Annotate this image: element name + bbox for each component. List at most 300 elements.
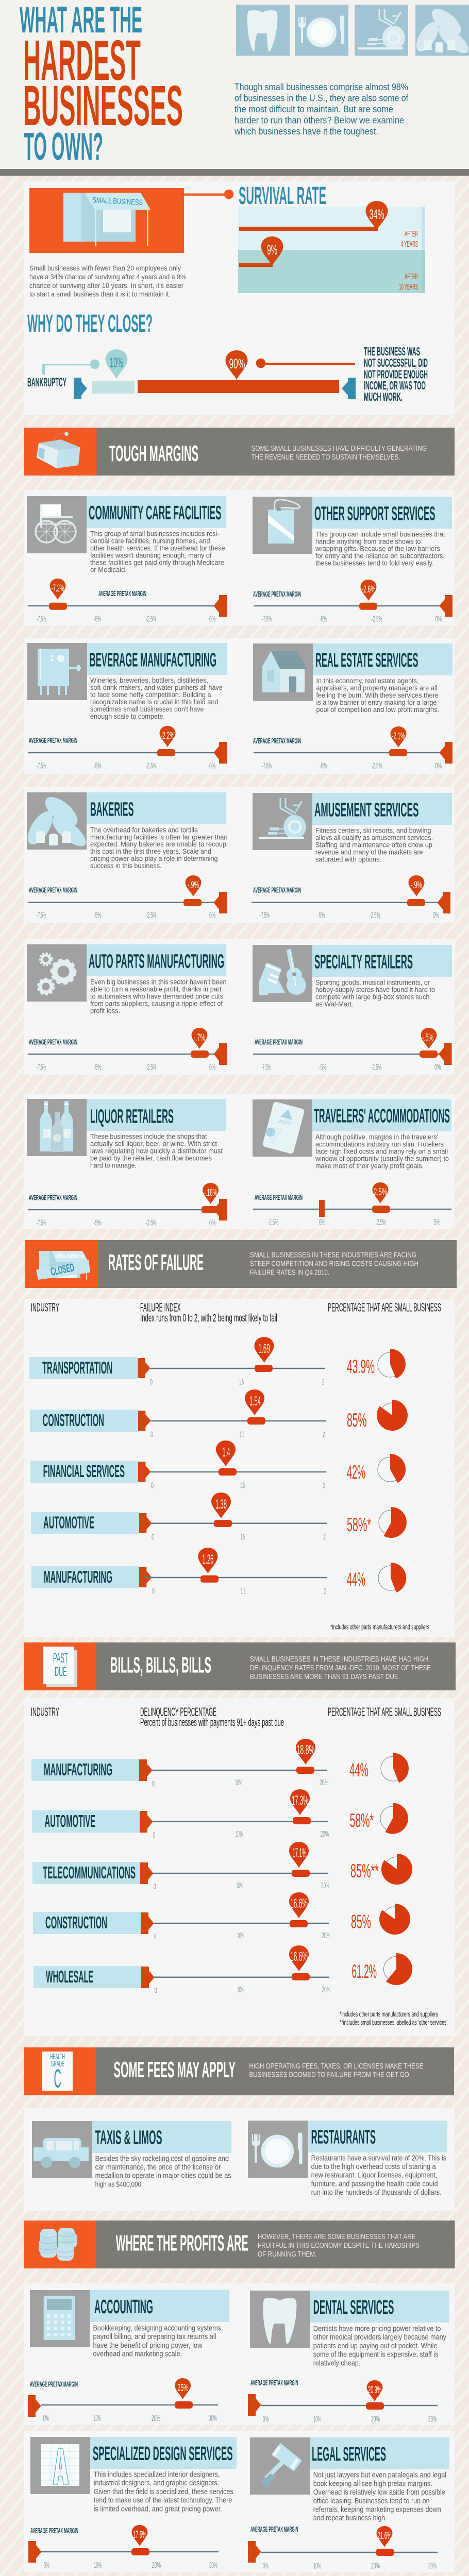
row: automotive: 17.3% [292,1793,308,1808]
body text [313,2471,446,2522]
row: construction: CONSTRUCTION [42,1411,104,1430]
chart: survival rate: 34% [369,207,384,222]
panel: rates of failure table [24,1299,455,1637]
chart: reasons for closing: 10% [110,355,123,370]
body text: other health services. If the overhead for these [90,545,225,552]
body text [90,1133,223,1170]
survival text block: have a 34% chance of surviving after 4 years and a 9% [29,273,186,281]
row: manufacturing: 20% [320,1778,328,1787]
body text: soft-drink makers, and water purifiers all have [90,684,223,691]
chart: margin 17.6%: 10% [94,2561,102,2570]
row: construction: 0 [154,1933,157,1941]
row: telecommunications: 20% [321,1882,330,1890]
body text: run into the hundreds of thousands of dollars. [311,2189,442,2197]
card: amusement services [252,793,452,920]
row: transportation: 1.5 [239,1378,244,1386]
body text: compete with large big-box stores such [315,993,430,1001]
card: community care facilities [27,496,227,624]
chart: margin 20.9%: 10% [313,2415,321,2424]
section header: where the profits are: WHERE THE PROFITS ARE [116,2230,248,2256]
row: telecommunications: 10% [236,1882,243,1890]
row: financial services: 2 [323,1481,325,1490]
chart: margin -.9%: -.9% [188,880,199,891]
body text: face high fixed costs and many rely on a small [315,1148,448,1156]
body text: patients end up paying out of pocket. While [313,2342,437,2350]
section header: some fees may apply [24,2047,454,2095]
body text [93,2324,223,2359]
icon: health grade card: GRADE [51,2060,64,2069]
chart: margin -.5%: -.5% [422,1032,433,1043]
chart: margin -.18%: -5% [94,1218,101,1227]
description: FRUITFUL IN THIS ECONOMY DESPITE THE HARDSHIPS [258,2242,420,2250]
chart: margin -2.6%: -2.6% [362,584,376,595]
description: HOWEVER, THERE ARE SOME BUSINESSES THAT ARE [258,2233,416,2241]
body text [94,2470,233,2513]
card: bakeries: BAKERIES [90,799,134,820]
icon: health grade card: C [54,2064,61,2093]
chart: margin -.7% [28,1028,227,1072]
column headers [31,1705,441,1728]
chart: margin -.18%: 0% [209,1218,215,1227]
card: bakeries [23,792,227,920]
chart: margin -.5% [253,1028,451,1072]
icon: past due note: PAST [53,1650,68,1666]
chart: margin 20.9%: 20% [371,2415,380,2424]
chart: margin 2.5%: 2.5% [377,1218,386,1227]
chart: margin 20.9%: 30% [428,2415,437,2424]
survival text block: Small businesses with fewer than 20 employees only [29,264,181,272]
chart: margin 20.9%: AVERAGE PRETAX MARGIN [250,2379,298,2387]
chart: margin -.18%: -.18% [204,1188,217,1198]
chart: margin -2.6%: -2.5% [372,615,382,624]
card: restaurants: RESTAURANTS [311,2127,376,2148]
body text: sometimes small businesses don't have [90,705,204,713]
description: SMALL BUSINESSES IN THESE INDUSTRIES ARE FACING [250,1251,416,1260]
row: manufacturing: 18.8% [297,1743,314,1757]
description [252,445,427,462]
row: automotive: AUTOMOTIVE [44,1811,95,1831]
body text: revenue and many of the markets are [315,848,423,856]
panel: beverage and real estate: BEVERAGE MANUFACTURING [90,649,216,671]
chart: margin -2.2%: -2.2% [161,731,175,741]
icon: hotel key card [253,1099,312,1157]
row: financial services: 42% [347,1462,365,1483]
chart: margin -.9%: -2.5% [146,911,157,920]
panel: taxis and restaurants [24,2108,455,2211]
body text: hard to manage. [90,1162,137,1170]
card: accounting: ACCOUNTING [94,2296,153,2318]
row: manufacturing: 1.5 [241,1587,246,1596]
body text: Although positive, margins in the travelers' [315,1133,438,1141]
chart: margin 17.6%: 17.6% [133,2530,146,2540]
icon: bottles [27,1099,87,1156]
panel: community care and other support [24,490,455,625]
row: financial services: 0 [151,1481,154,1490]
body text: Overhead is relatively low aside from possible [313,2488,445,2497]
body text [90,826,228,870]
chart: margin -7.2%: AVERAGE PRETAX MARGIN [98,590,146,598]
row: construction: 20% [322,1931,330,1940]
chart: reasons for closing: MUCH WORK. [364,390,403,403]
row: construction: 85% [351,1911,371,1933]
row: construction [33,1892,410,1941]
icon: gavel [250,2437,310,2495]
body text [315,979,435,1008]
chart: margin 21.6%: AVERAGE PRETAX MARGIN [250,2526,298,2534]
row: transportation [29,1337,406,1386]
body text: accommodations industry run slim. Hoteliers [315,1141,444,1148]
intro text: the most difficult to maintain. But are some [234,104,393,114]
body text: appraisers, and property managers are all [316,684,437,692]
body text: able to turn a reasonable profit, thanks in part [90,986,222,993]
card: real estate services [253,643,453,771]
row: financial services: FINANCIAL SERVICES [43,1462,125,1481]
body text: pricing power also play a role in determining [90,855,217,862]
body text: these businesses tend to fold very easily. [315,560,434,567]
body text: The overhead for bakeries and tortilla [90,826,198,834]
row: construction: 85% [347,1410,367,1431]
chart: margin -.7%: -5% [94,1063,101,1072]
row: wholesale: 16.6% [290,1950,308,1964]
chart: margin -2.6%: AVERAGE PRETAX MARGIN [253,590,301,599]
chart: margin 21.6%: 10% [313,2562,321,2571]
row: manufacturing: 10% [235,1778,242,1787]
row: wholesale: 20% [322,1986,330,1994]
body text: actually sell liquor, beer, or wine. With strict [90,1140,217,1148]
chart: margin -.5%: AVERAGE PRETAX MARGIN [255,1038,303,1046]
icon: elliptical machine [253,793,312,850]
icon: house [253,643,313,701]
row: automotive: 0 [152,1533,155,1541]
chart: margin -.18% [28,1183,227,1227]
chart: margin 2.5%: AVERAGE PRETAX MARGIN [255,1194,303,1202]
chart: margin -.7%: 0% [209,1063,215,1072]
body text: book keeping all see high pretax margins. [313,2480,432,2488]
body text: to automakers who have demanded price cuts [90,993,223,1001]
body text: handle anything from trade shows to [315,538,421,546]
body text [315,531,445,567]
chart: margin -.5%: -5% [319,1063,327,1072]
icon: coin stacks [39,2228,77,2261]
icon: health grade card: HEALTH [50,2053,65,2061]
row: telecommunications: TELECOMMUNICATIONS [43,1863,136,1882]
body text [95,2155,231,2189]
row: construction: 16.6% [290,1896,308,1911]
row: manufacturing: 2 [324,1587,326,1596]
row: manufacturing: 1.26 [202,1552,213,1567]
card: taxis and limos [32,2121,231,2189]
body text: success in this business. [90,862,162,870]
illustration: small business storefront [29,188,184,253]
survival text block: to start a small business than it is it to maintain it. [29,291,171,298]
body text: Dentists have more pricing power relative to [313,2325,441,2333]
intro text: Though small businesses comprise almost 98% [234,81,408,92]
section header: bills, bills, bills: BILLS, BILLS, BILLS [110,1653,211,1678]
chart: margin 2.5%: 2.5% [374,1187,387,1198]
chart: margin 25%: 25% [177,2383,189,2394]
row: construction: 0 [150,1430,153,1439]
body text: window of opportunity (usually the summer) to [315,1155,449,1163]
chart: reasons for closing: 90% [229,356,245,371]
chart: margin -.9%: -7.5% [260,911,270,920]
card: restaurants [248,2121,447,2197]
body text: feeling the burn. With these services there [316,691,439,699]
chart: margin -2.1%: -7.5% [262,762,272,771]
row: automotive: 1.5 [241,1533,245,1541]
column headers: FAILURE INDEX [140,1301,181,1314]
row: manufacturing: 0 [152,1587,155,1596]
row: construction: 10% [237,1931,244,1940]
chart: margin 2.5%: 0% [319,1218,325,1227]
section header: rates of failure: RATES OF FAILURE [108,1250,204,1275]
body text: overhead and marketing scale. [93,2350,182,2359]
body text: Even big businesses in this sector haven't been [90,978,227,986]
text: BUSINESSES [23,74,183,138]
icon: gears [27,944,87,1002]
description: SMALL BUSINESSES IN THESE INDUSTRIES HAVE HAD HIGH [250,1655,429,1664]
section header: where the profits are [24,2221,455,2268]
column headers: INDUSTRY [31,1705,59,1719]
section header: rates of failure [25,1240,457,1288]
chart: margin 25%: 30% [209,2414,217,2423]
chart: reasons for closing [27,345,428,403]
body text: other medical providers largely because many [313,2333,447,2342]
body text: be paid by the retailer, cash flow becomes [90,1155,212,1162]
chart: margin -7.2%: -5% [94,615,101,624]
description: BUSINESSES DOOMED TO FAILURE FROM THE GET GO. [249,2071,411,2079]
row: manufacturing: 44% [349,1759,368,1781]
chart: margin 2.5% [253,1182,451,1227]
body text [313,2325,447,2367]
body text: In this economy, real estate agents, [316,677,418,685]
panel: community care and other support: COMMUNITY CARE FACILITIES [89,502,222,524]
footnotes [340,2010,447,2026]
chart: reasons for closing: BANKRUPTCY [27,376,66,389]
chart: margin -2.1% [253,726,453,771]
body text: laws regulating how quickly a distributor must [90,1147,223,1155]
illustration: small business storefront: SMALL BUSINESS [92,196,143,207]
card: other support services [253,497,453,624]
body text: Bookkeeping, designing accounting systems, [93,2324,223,2332]
connector line [184,190,233,199]
row: manufacturing: 44% [347,1569,365,1590]
row: transportation: 2 [322,1378,325,1386]
icon: plate tile [295,5,348,56]
body text: enough scale to compete. [90,713,165,720]
chart: margin 17.6%: AVERAGE PRETAX MARGIN [30,2527,78,2535]
row: automotive [31,1493,407,1541]
body text: wrapping gifts. Because of the low barriers [315,545,440,553]
body text [315,826,433,863]
body text: This group can include small businesses that [315,531,445,538]
card: beverage manufacturing [27,643,227,771]
chart: margin -7.2% [28,579,227,624]
chart: margin -2.2%: 0% [209,762,215,771]
body text: recognizable name is crucial in this field and [90,698,219,706]
row: manufacturing: MANUFACTURING [44,1567,112,1586]
chart: margin -.9% [28,875,227,920]
row: automotive: 58%* [349,1810,374,1831]
body text: Restaurants have a survival rate of 20%. This is [311,2154,446,2162]
body text: relatively cheap. [313,2359,360,2367]
icon: hotel key card: HOTEL [266,1125,284,1146]
panel: liquor retailers and travelers' accommodations [24,1094,455,1229]
description: THE REVENUE NEEDED TO SUSTAIN THEMSELVES. [252,453,400,462]
icon: closed store [36,1251,90,1280]
body text: make most of their yearly profit goals. [315,1162,424,1170]
description: SOME SMALL BUSINESSES HAVE DIFFICULTY GENERATING [252,445,427,453]
chart: margin -2.1%: -5% [320,762,327,771]
chart: margin 17.6%: 30% [209,2561,217,2570]
body text: for entry and the reliance on subcontractors, [315,552,445,560]
body text: or Medicaid. [90,566,127,573]
chart: margin 21.6%: 20% [371,2562,380,2571]
chart: margin -2.6% [253,580,453,624]
chart: margin 25%: AVERAGE PRETAX MARGIN [30,2381,78,2389]
icon: hotel key card: INSERT [277,1118,292,1128]
panel: survival rate and why do they close: SURVIVAL RATE [239,182,326,210]
chart: margin -.9%: -.9% [411,880,422,891]
icon: bread [23,792,90,851]
row: automotive: 20% [321,1830,329,1839]
chart: margin -.5%: -2.5% [371,1063,381,1072]
body text: manufacturing facilities is often far greater than [90,833,228,841]
section header: tough margins [24,428,455,476]
row: manufacturing [31,1548,406,1596]
description [250,1655,431,1681]
row: construction: 1.5 [240,1430,244,1439]
card: legal services [248,2437,449,2571]
row: construction: 1.54 [249,1394,261,1409]
column headers: Percent of businesses with payments 91+ days past due [140,1717,284,1728]
row: transportation: 0 [150,1378,153,1386]
chart: margin -2.2%: -5% [94,762,101,771]
chart: margin -.7%: AVERAGE PRETAX MARGIN [29,1038,77,1046]
body text: These businesses include the shops that [90,1133,207,1141]
description [249,2062,424,2079]
chart: margin -.18%: -2.5% [146,1218,157,1227]
row: transportation: 1.69 [258,1342,270,1356]
body text: some of the equipment is expensive, staff is [313,2351,438,2359]
description [250,1251,418,1277]
section header: some fees may apply: SOME FEES MAY APPLY [113,2057,236,2082]
panel: beverage and real estate [24,638,455,774]
card: specialty retailers [253,945,452,1072]
row: automotive: 1.38 [215,1497,227,1512]
card: liquor retailers: LIQUOR RETAILERS [90,1106,174,1127]
card: specialized design services [28,2437,237,2570]
icon: past due note [43,1647,77,1687]
icon: plate [248,2121,308,2178]
chart: margin -.9%: 0% [433,911,439,920]
section header: tough margins: TOUGH MARGINS [109,441,198,466]
survival text block [29,264,186,298]
row: transportation: TRANSPORTATION [42,1358,112,1377]
body text: facilities wasn't daunting enough, many of [90,552,212,560]
title: WHAT ARE THE [20,0,142,41]
card: dental services [248,2291,449,2424]
chart: margin 17.6% [28,2525,219,2570]
body text: car maintenance, the price of the license or [95,2163,221,2172]
body text: referrals, keeping marketing expenses down [313,2506,441,2514]
body text: high as $400,000. [95,2180,143,2189]
chart: margin 2.5%: 5% [434,1218,440,1227]
body text: This includes specialized interior designers, [94,2470,220,2479]
body text: hobby-supply stores have found it hard to [315,986,435,994]
icon: letter on grid [30,2437,90,2494]
title [20,0,183,168]
chart: margin -2.6%: -5% [320,615,327,624]
panel: accounting and dental services [24,2283,455,2425]
body text: alleys all qualify as amusement services. [315,834,433,841]
row: manufacturing: MANUFACTURING [44,1760,112,1779]
chart: margin 20.9%: 0% [263,2415,269,2424]
icon: bread tile [412,4,469,58]
body text: dential care facilities, nursing homes, and [90,537,210,545]
description: STEEP COMPETITION AND RISING COSTS CAUSING HIGH [250,1260,418,1268]
icon: wheelchair [27,496,87,553]
icon: car [32,2121,92,2178]
body text: medallion to operate in major cities could be as [95,2172,231,2180]
card: liquor retailers [27,1099,227,1227]
chart: margin -.9%: -7.5% [37,911,46,920]
body text: expected. Many bakeries are unable to recoup [90,840,226,848]
title: HARDEST [23,29,141,92]
chart: margin -7.2%: -7.2% [52,583,64,594]
icon: health grade card [42,2052,73,2093]
row: wholesale: WHOLESALE [46,1967,93,1986]
row: construction [30,1389,408,1439]
panel: design and legal services [24,2431,455,2572]
body text [90,978,227,1015]
chart: margin -.9%: AVERAGE PRETAX MARGIN [253,887,301,895]
chart: margin 25%: 20% [152,2414,160,2423]
chart: margin 21.6% [248,2526,438,2571]
row: automotive: AUTOMOTIVE [43,1513,94,1532]
row: wholesale [34,1945,412,1995]
card: accounting [28,2290,229,2423]
body text: industrial designers, and graphic designers. [94,2479,219,2487]
chart: margin -.9%: 0% [209,911,215,920]
chart: margin -.9% [252,875,450,920]
survival text block: chance of surviving after 10 years. In short, it's easier [29,282,183,290]
row: telecommunications [32,1842,412,1891]
chart: margin 17.6%: 0% [44,2561,49,2570]
chart: survival rate: AFTER [405,230,418,239]
column headers [31,1301,441,1324]
intro text: of businesses in the U.S., they are also some of [234,93,409,104]
chart: margin -2.2%: AVERAGE PRETAX MARGIN [29,737,77,745]
body text: Given that the field is specialized, these services [94,2488,233,2496]
chart: margin -.18%: AVERAGE PRETAX MARGIN [29,1194,77,1202]
chart: margin -.5%: -7.5% [261,1063,271,1072]
chart: margin -2.2% [28,726,227,771]
row: financial services: 1.4 [223,1445,230,1460]
body text: is a low barrier of entry making for a large [316,699,437,706]
row: financial services [30,1440,406,1490]
panel: auto parts and specialty retailers [24,939,455,1075]
row: wholesale: 10% [237,1986,244,1994]
icon: closed store: SMALL BUSINESS [55,1253,84,1259]
body text: to face some hefty competition. Building a [90,691,211,699]
row: telecommunications: 17.1% [293,1846,306,1860]
intro text [234,81,409,137]
icon: tooth tile [236,5,290,56]
chart: margin -2.2%: -2.5% [146,762,157,771]
row: automotive [32,1789,408,1840]
title: TO OWN? [24,125,103,168]
chart: margin -.9%: -2.5% [370,911,380,920]
